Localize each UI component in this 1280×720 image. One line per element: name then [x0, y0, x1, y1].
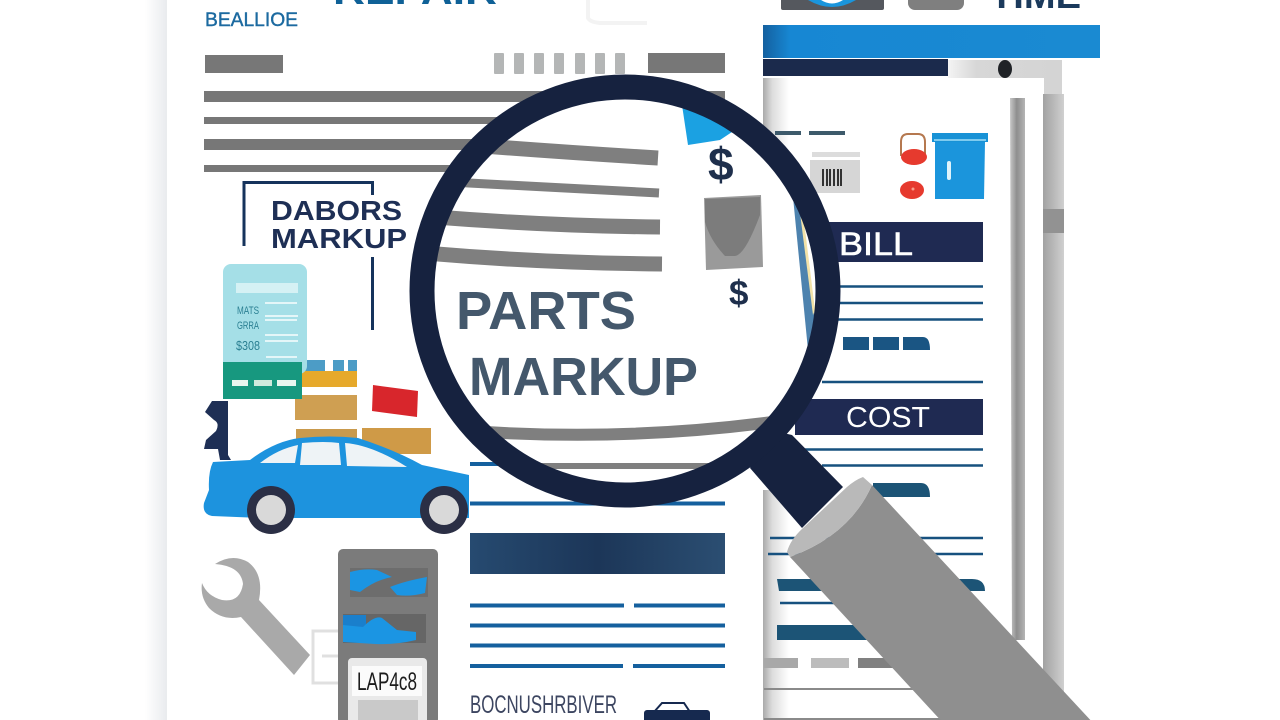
subheading: BEALLIOE: [205, 10, 298, 31]
handle cap: [787, 477, 872, 557]
COST header: COST: [846, 402, 930, 434]
label: parts markup: [460, 292, 696, 396]
label: parts markup: PARTS: [456, 281, 636, 341]
parts cabinet: LAP4c8: [357, 668, 417, 696]
page edge strip: [793, 197, 815, 350]
icon: briefcase: [644, 703, 710, 720]
tick marks: [494, 53, 625, 74]
bill rows: [822, 286, 983, 382]
icon: wrench: [202, 558, 310, 675]
lens view: [436, 100, 815, 469]
page shadow strip bottom: [763, 490, 789, 720]
top-right icon tiles: [781, 0, 964, 10]
lens ring: [422, 87, 828, 495]
binder pin: [998, 60, 1012, 78]
blue corner fragment: [682, 108, 732, 145]
dollar sign small: $: [729, 274, 748, 313]
bracket: [244, 182, 372, 330]
label: labor markup: DABORS: [271, 195, 402, 226]
handle neck: [750, 430, 843, 528]
small labels: [775, 131, 845, 135]
outer paper edge strip: [1043, 94, 1064, 694]
dollar sign: $: [708, 138, 734, 190]
handle grip: [790, 485, 1095, 720]
left page shadow: [145, 0, 167, 720]
faint stamp: [588, 0, 647, 23]
label: labor markup: [271, 195, 407, 254]
grey footer dashes: [764, 658, 964, 720]
page shadow strip top: [763, 78, 789, 203]
magnifying glass: [420, 87, 1095, 720]
blue text rows: [470, 606, 725, 666]
receipt: [223, 264, 307, 399]
receipt: GRRA: [237, 320, 259, 332]
COST header: [795, 399, 983, 435]
icon: bracket tool: [204, 401, 231, 460]
label: parts markup: MARKUP: [469, 347, 698, 407]
BILL header: BILL: [839, 226, 913, 262]
icon: red valve: [900, 134, 927, 199]
grey back sheet: [948, 60, 1062, 95]
barcode tag: [810, 152, 860, 193]
label: labor markup: MARKUP: [271, 223, 407, 254]
icon: blue car: [204, 436, 469, 534]
receipt: MATS: [237, 305, 259, 317]
receipt: $308: [236, 338, 260, 353]
blue header bar: [763, 25, 1100, 58]
boxes: [295, 360, 431, 454]
blue rows above bar: [470, 464, 725, 504]
navy section bar: [470, 533, 725, 574]
text rows: [204, 91, 725, 172]
connector bracket: [313, 631, 338, 683]
footer text: BOCNUSHRBIVER: [470, 691, 617, 719]
grey label block: [205, 55, 283, 73]
icon: blue bin: [932, 133, 988, 199]
grey parts box: [704, 195, 763, 270]
panel: front invoice page: [202, 0, 725, 720]
vertical paper edge strip: [1010, 98, 1025, 640]
cost rows: [768, 450, 985, 640]
grey block right: [648, 53, 725, 73]
magnified rows: [425, 145, 780, 466]
BILL header: [825, 222, 983, 262]
navy header bar: [763, 59, 948, 76]
parts cabinet: [338, 549, 438, 720]
panel: back page right: [763, 0, 1100, 720]
